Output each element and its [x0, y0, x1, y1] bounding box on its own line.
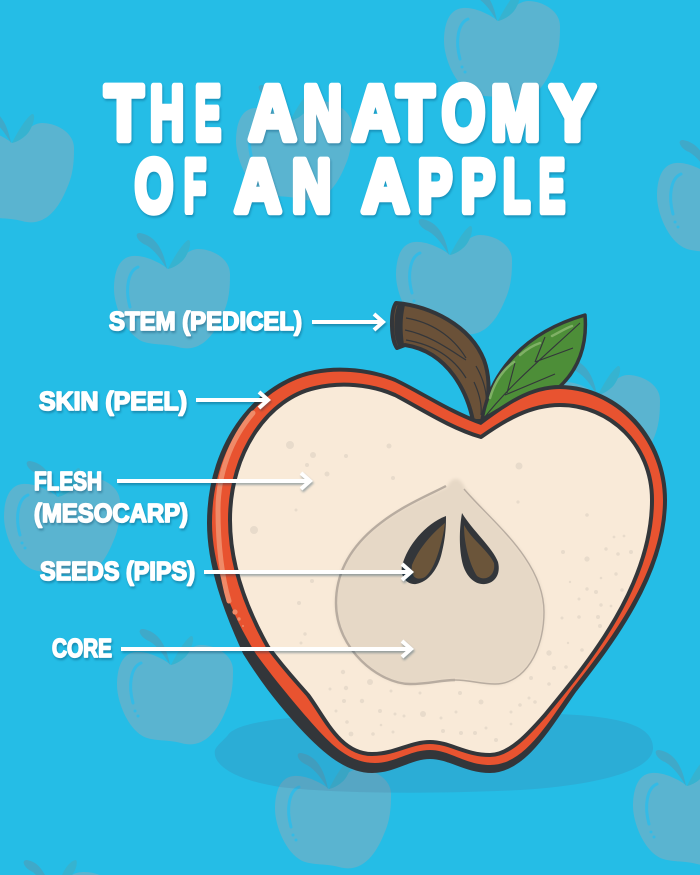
- right seed: [460, 513, 499, 584]
- flesh speckles: [250, 441, 633, 742]
- arrow: core: [121, 641, 411, 657]
- apple outer dark edge: [209, 370, 665, 771]
- leaf: [482, 315, 585, 420]
- title line 2: A: [235, 144, 281, 228]
- label: skin: SKIN (PEEL): [39, 386, 187, 416]
- title line 1: N: [303, 70, 342, 156]
- arrow: skin: [196, 392, 268, 408]
- seeds: [402, 513, 499, 584]
- title line 2: L: [503, 144, 530, 228]
- title line 2: F: [184, 144, 206, 228]
- apple core: [335, 479, 545, 685]
- title line 1: A: [249, 70, 296, 156]
- skin highlight: [218, 413, 253, 627]
- title line 1: Y: [550, 70, 595, 156]
- apple skin: [212, 372, 663, 765]
- labels and arrows: [34, 306, 411, 663]
- core outline right: [455, 489, 544, 684]
- ground shadow: [215, 713, 653, 793]
- title line 2: N: [292, 144, 331, 228]
- label: seeds: SEEDS (PIPS): [40, 556, 195, 586]
- stem: [392, 303, 488, 421]
- title line 1: T: [105, 70, 143, 156]
- title line 2: A: [362, 144, 409, 228]
- title line 1: A: [352, 70, 399, 156]
- title line 1: O: [442, 70, 485, 156]
- arrow: stem: [312, 314, 383, 330]
- title line 2: O: [135, 144, 173, 228]
- label: core: CORE: [52, 633, 112, 663]
- title line 1: E: [195, 70, 221, 156]
- title line 2: P: [418, 144, 452, 228]
- title: [105, 70, 595, 228]
- apple flesh: [230, 385, 652, 755]
- arrow: seeds: [204, 564, 411, 580]
- title line 2: E: [539, 144, 565, 228]
- label: flesh: FLESH: [34, 466, 102, 496]
- label: stem: STEM (PEDICEL): [109, 306, 302, 336]
- arrow: flesh: [117, 473, 310, 489]
- title line 1: M: [491, 70, 540, 156]
- left seed: [402, 516, 446, 584]
- label: flesh: (MESOCARP): [34, 498, 188, 528]
- title line 1: H: [150, 70, 184, 156]
- apple body: [209, 370, 665, 771]
- title line 2: P: [461, 144, 495, 228]
- title line 1: T: [397, 70, 434, 156]
- core outline left: [336, 486, 455, 684]
